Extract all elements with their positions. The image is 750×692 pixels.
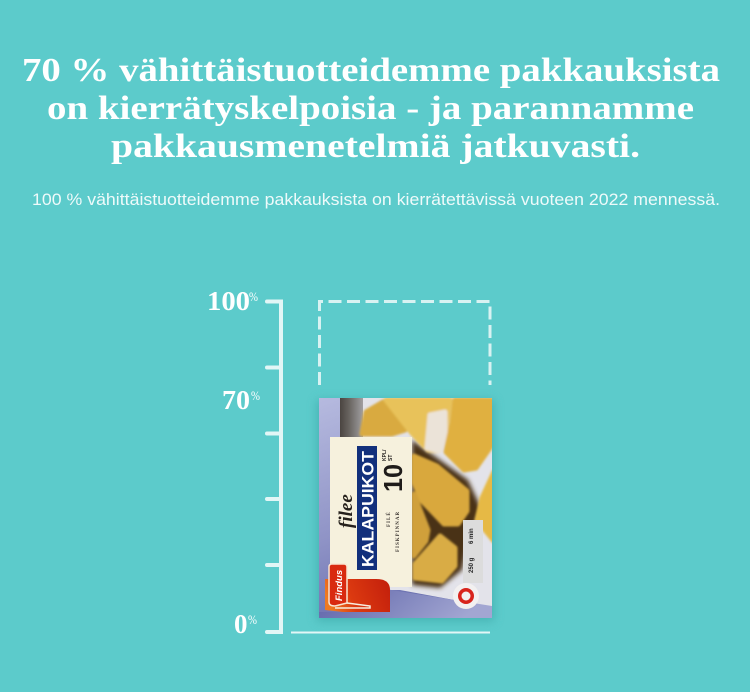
- product package: Findus Kalapuikot: ST: [388, 455, 394, 461]
- axis labels: %: [251, 388, 260, 403]
- tray white surface: [363, 398, 492, 607]
- vertical scale axis: [267, 302, 281, 632]
- axis labels: %: [249, 289, 258, 304]
- fish sticks: [362, 400, 494, 581]
- axis labels: 70: [222, 385, 250, 415]
- product package: Findus Kalapuikot: FISKPINNAR: [396, 511, 401, 552]
- axis labels: 100: [207, 286, 250, 316]
- title: 70 % vähittäistuotteidemme pakkauksista: [22, 52, 720, 89]
- title: pakkausmenetelmiä jatkuvasti.: [111, 128, 640, 165]
- blue banner: [357, 446, 377, 570]
- axis labels: [207, 286, 260, 639]
- title: on kierrätyskelpoisia - ja parannamme: [47, 90, 694, 127]
- descriptor: FILÉ: [386, 511, 392, 527]
- product shadow: [317, 400, 494, 621]
- Findus logo: Findus: [334, 570, 345, 601]
- pack weight: 250 g: [469, 557, 475, 573]
- subtitle: 100 % vähittäistuotteidemme pakkauksista on kierrätettävissä vuoteen 2022 mennessä.: [32, 191, 720, 209]
- product name: KALAPUIKOT: [358, 450, 378, 567]
- product package: Findus Kalapuikot: [319, 398, 494, 618]
- baseline: [291, 632, 490, 634]
- Findus logo: [325, 564, 390, 612]
- lower periwinkle table: [319, 589, 492, 618]
- Filee script: filee: [336, 494, 357, 528]
- count 10: 10: [378, 464, 408, 492]
- dashed outline: remaining 30 % target: [320, 302, 490, 385]
- dark shadow under fish: [412, 440, 482, 588]
- product package: Findus Kalapuikot: 6 min: [469, 528, 475, 544]
- axis labels: 0: [234, 609, 248, 639]
- info strip: [463, 520, 483, 583]
- tray metal: [340, 398, 364, 438]
- recycling seal: [453, 583, 479, 609]
- axis labels: %: [248, 612, 257, 627]
- pcs label: KPL/: [382, 449, 388, 461]
- title: [22, 52, 720, 165]
- cream label: [330, 437, 412, 587]
